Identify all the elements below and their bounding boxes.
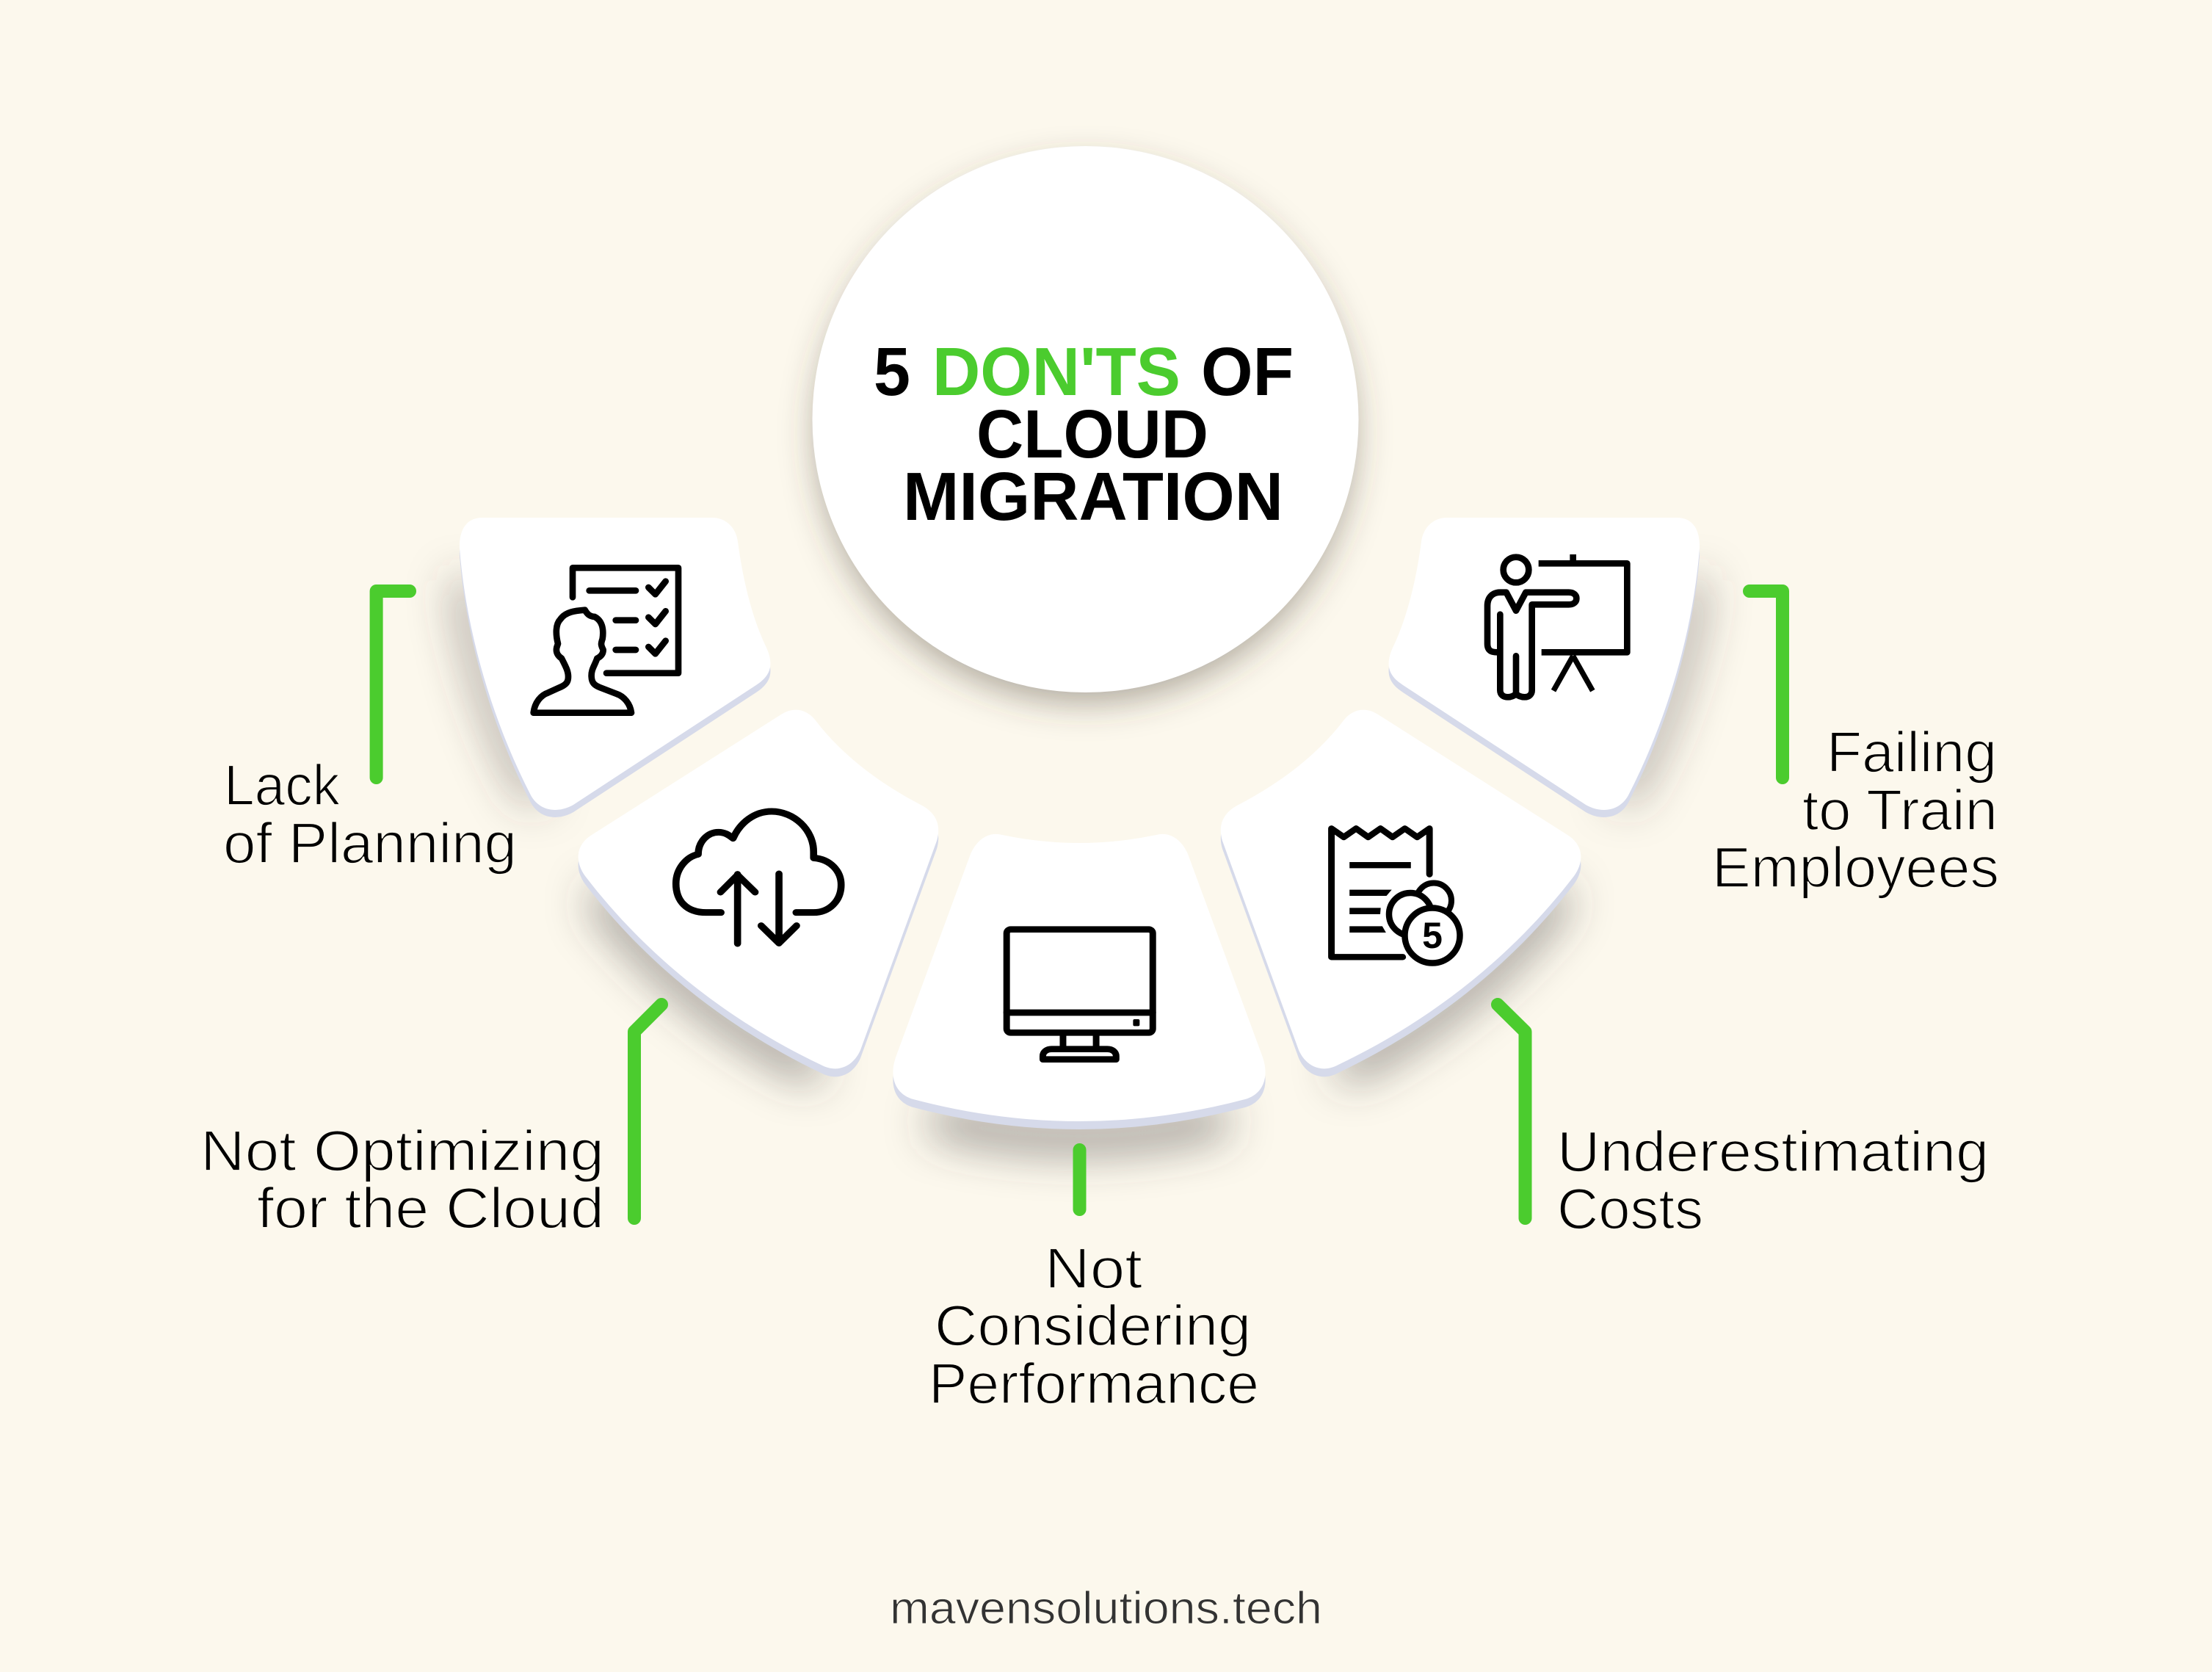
footer: website: mavensolutions.tech	[890, 1583, 1322, 1634]
label: not considering performance: Not	[1045, 1236, 1142, 1300]
panel: not optimizing card	[579, 710, 938, 1076]
label: failing to train employees: Employees	[1712, 835, 1999, 900]
label: not optimizing for the cloud: Not Optimizing	[200, 1118, 604, 1183]
connector: failing to train	[1749, 591, 1783, 778]
icon: person with checklist	[534, 568, 678, 713]
icon: receipt with coins: 5	[1422, 915, 1443, 956]
connector: not considering performance	[1073, 1150, 1087, 1209]
icon: cloud with up and down arrows	[676, 811, 841, 944]
label: failing to train employees	[1712, 720, 1999, 900]
connector: not optimizing	[634, 1005, 661, 1218]
label: not considering performance	[929, 1236, 1259, 1416]
title: OF	[1201, 333, 1294, 410]
panel: underestimating costs card	[1221, 710, 1581, 1076]
title: 5	[874, 333, 910, 410]
title: CLOUD	[976, 396, 1208, 472]
title: MIGRATION	[903, 458, 1283, 535]
label: not optimizing for the cloud	[200, 1118, 604, 1240]
label: not considering performance: Considering	[935, 1293, 1251, 1358]
label: failing to train employees: Failing	[1827, 720, 1997, 784]
label: underestimating costs	[1557, 1119, 1989, 1241]
label: not considering performance: Performance	[929, 1351, 1259, 1416]
icon: desktop monitor	[1007, 930, 1153, 1060]
panel: failing to train card	[1389, 518, 1700, 817]
label: lack of planning: Lack	[224, 753, 341, 817]
label: underestimating costs: Costs	[1557, 1176, 1703, 1241]
icon: receipt with coins	[1332, 828, 1459, 963]
label: lack of planning: of Planning	[223, 811, 517, 875]
connector: underestimating costs	[1498, 1005, 1526, 1218]
label: lack of planning	[223, 753, 517, 875]
title: DON'TS	[932, 333, 1181, 410]
title	[874, 333, 1294, 535]
panel: not considering performance card	[893, 834, 1266, 1137]
connector: lack of planning	[377, 591, 410, 778]
panel: lack of planning card	[460, 518, 770, 817]
panel: center title circle	[812, 146, 1358, 702]
label: failing to train employees: to Train	[1802, 778, 1998, 842]
icon: presenter at board	[1487, 554, 1627, 697]
label: underestimating costs: Underestimating	[1557, 1119, 1989, 1184]
label: not optimizing for the cloud: for the Cloud	[257, 1176, 604, 1240]
